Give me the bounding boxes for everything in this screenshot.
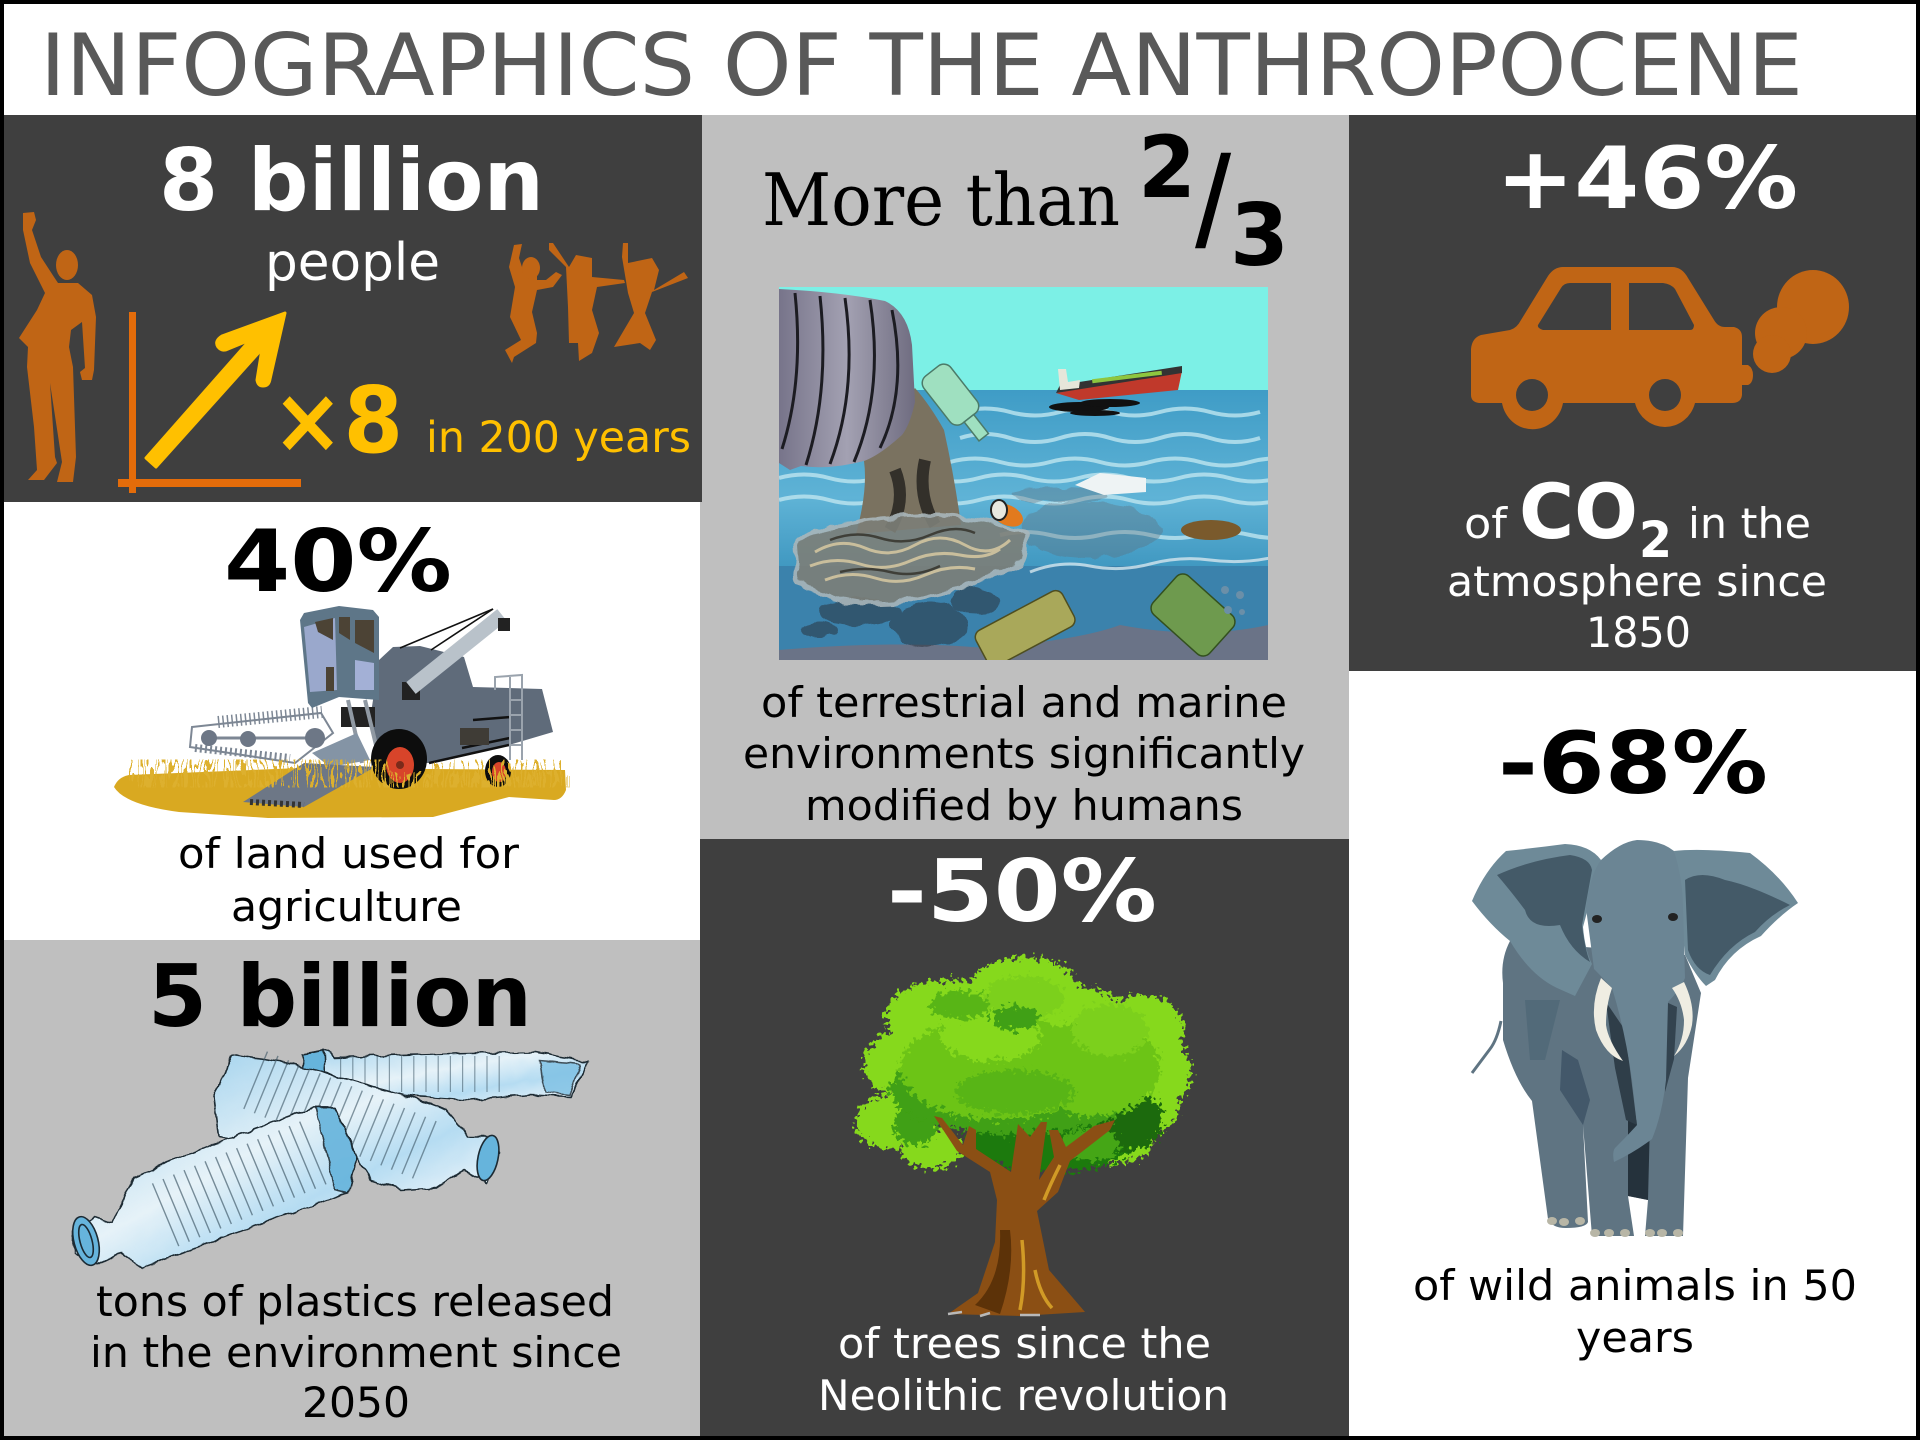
stat: 5 billion: 5 billion	[148, 947, 532, 1047]
panel: plastics	[4, 940, 700, 1436]
panel: modified environments	[700, 115, 1349, 839]
arrow: growth	[146, 313, 285, 467]
caption: CO2: 2	[1639, 511, 1672, 569]
stat: 8 billion: 8 billion	[159, 131, 544, 231]
caption: CO2	[1447, 467, 1827, 657]
panel: 8 billion people	[4, 115, 702, 502]
caption: trees: Neolithic revolution	[818, 1371, 1229, 1420]
stat: -68%: -68%	[1498, 714, 1768, 814]
header panel	[4, 4, 1916, 116]
panel: trees	[700, 839, 1349, 1436]
caption: land used: agriculture	[231, 882, 462, 931]
caption: CO2: CO	[1519, 467, 1638, 556]
icon: combine harvester	[114, 606, 566, 818]
caption: trees: of trees since the	[838, 1319, 1211, 1368]
caption: modified environments: environments significantly	[743, 729, 1305, 778]
chart axes	[118, 312, 301, 493]
caption: land used	[178, 829, 520, 931]
caption: CO2: of	[1464, 499, 1508, 548]
caption: CO2: 1850	[1586, 608, 1691, 657]
icon: jumping children	[505, 243, 688, 363]
icon: elephant	[1472, 840, 1798, 1237]
icon: crushed plastic bottles	[68, 1050, 587, 1268]
caption: plastics	[90, 1277, 622, 1427]
icon: man silhouette	[19, 212, 96, 482]
caption: land used: of land used for	[178, 829, 520, 878]
label: in 200 years: in 200 years	[426, 413, 691, 463]
panel: wild animals	[1349, 671, 1916, 1436]
caption: modified environments	[743, 678, 1305, 830]
caption: modified environments: of terrestrial and marine	[761, 678, 1287, 727]
heading: more than two thirds: 2	[1138, 118, 1196, 218]
caption: modified environments: modified by humans	[805, 781, 1243, 830]
caption: wild animals: years	[1576, 1313, 1694, 1362]
panel: CO2	[1349, 115, 1916, 671]
icon: car with exhaust	[1471, 267, 1849, 429]
label: people: people	[265, 233, 440, 293]
caption: plastics: tons of plastics released	[96, 1277, 614, 1326]
heading: more than two thirds: More than	[762, 158, 1120, 242]
caption: wild animals	[1413, 1261, 1857, 1362]
heading: more than two thirds: /	[1195, 129, 1232, 275]
stat: +46%: +46%	[1496, 129, 1798, 229]
caption: trees	[818, 1319, 1229, 1420]
title: INFOGRAPHICS OF THE ANTHROPOCENE	[40, 16, 1803, 116]
heading: more than two thirds: 3	[1230, 186, 1289, 286]
caption: CO2: atmosphere since	[1447, 557, 1827, 606]
stat: times 8: ×8	[272, 367, 403, 474]
heading: more than two thirds	[762, 118, 1289, 286]
caption: plastics: in the environment since	[90, 1328, 622, 1377]
stat: -50%: -50%	[887, 842, 1157, 942]
stat: 40%: 40%	[224, 512, 452, 612]
panel: agriculture	[4, 502, 702, 940]
icon: tree	[855, 957, 1191, 1316]
illustration: marine pollution scene	[779, 287, 1300, 669]
caption: CO2: in the	[1688, 499, 1811, 548]
caption: plastics: 2050	[302, 1378, 410, 1427]
caption: wild animals: of wild animals in 50	[1413, 1261, 1857, 1310]
